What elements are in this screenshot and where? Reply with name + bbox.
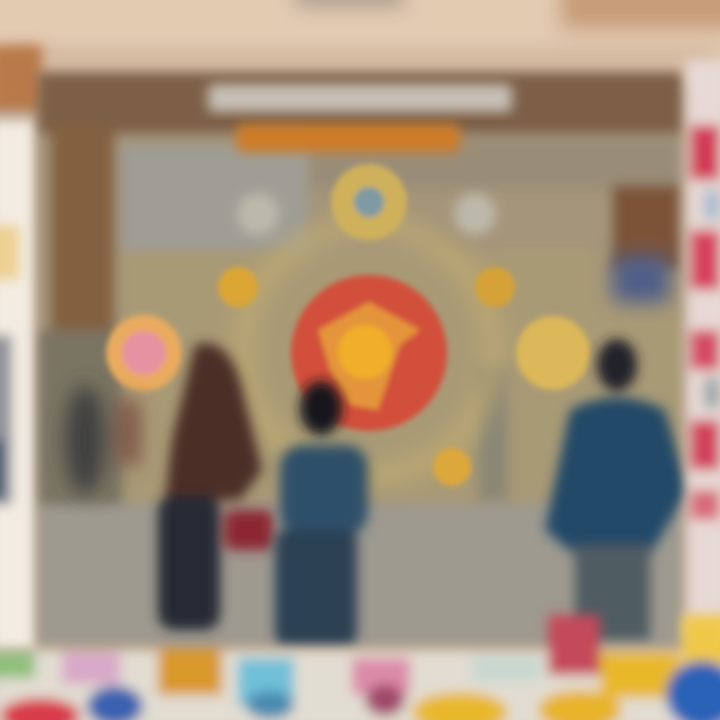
icon: top circle xyxy=(331,164,407,240)
icon: grey left circle xyxy=(237,193,279,235)
person: centre child xyxy=(275,381,368,645)
wall panel xyxy=(38,72,683,647)
icon: small yellow right xyxy=(475,267,515,307)
icon: yellow circle right xyxy=(516,316,590,390)
icon: pink circle xyxy=(106,315,182,391)
person: small background figure xyxy=(65,385,138,495)
right patterned strip xyxy=(686,60,720,640)
diagram: faint ring xyxy=(243,225,493,475)
bottom colourful toys strip xyxy=(0,615,720,720)
icon: grey right circle xyxy=(454,193,496,235)
icon: small yellow left xyxy=(218,267,258,307)
poster: blue patch right xyxy=(612,255,670,303)
heading: title bar xyxy=(208,84,512,112)
left white wall strip xyxy=(0,45,42,650)
icon: small yellow bottom xyxy=(433,448,471,486)
heading: orange subtitle bar xyxy=(236,124,460,152)
diagram: central red target xyxy=(291,275,447,431)
person: woman with long hair xyxy=(158,343,273,630)
ceiling xyxy=(0,0,720,80)
person: right adult xyxy=(545,339,688,640)
